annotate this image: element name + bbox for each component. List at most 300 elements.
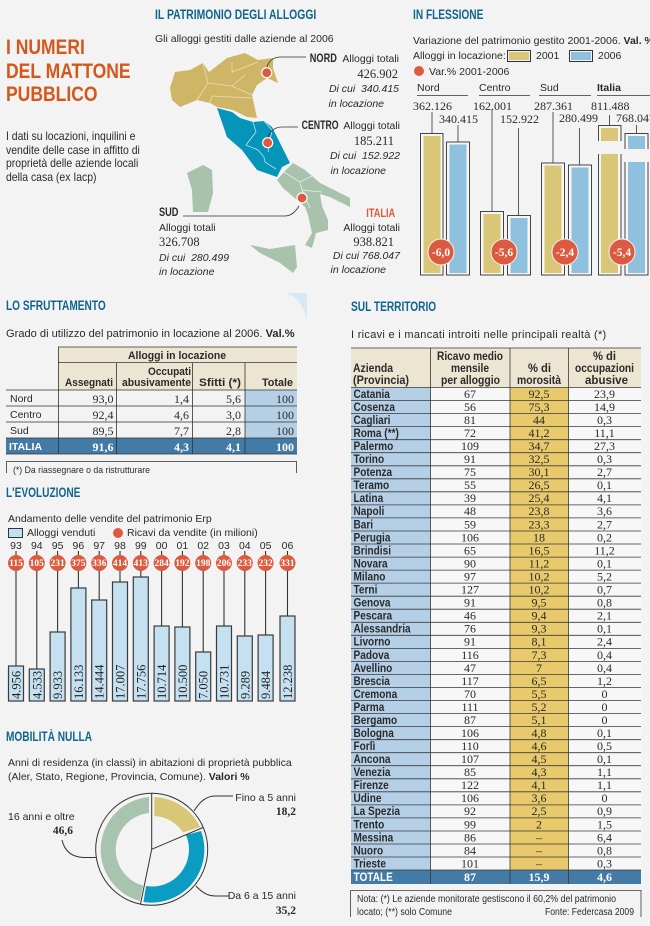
table: sul territorio: Parma bbox=[354, 701, 385, 714]
table: sul territorio: 91 bbox=[464, 634, 476, 648]
table: sul territorio: Padova bbox=[354, 649, 390, 662]
bar chart: in flessione: -6,0 bbox=[432, 247, 450, 259]
table: sul territorio: 11,2 bbox=[529, 556, 549, 570]
table: sul territorio: TOTALE bbox=[354, 871, 393, 884]
bar chart: l'evoluzione: 96 bbox=[73, 540, 84, 552]
bar chart: l'evoluzione: 10.500 bbox=[176, 665, 190, 699]
table: sul territorio: 2,5 bbox=[532, 804, 546, 818]
table: sul territorio: locato; (**) solo Comune bbox=[357, 907, 452, 918]
table: sul territorio: – bbox=[535, 856, 543, 870]
table: sul territorio: 70 bbox=[464, 687, 476, 701]
bar chart: l'evoluzione: 06 bbox=[282, 540, 293, 552]
heading: lo sfruttamento: LO SFRUTTAMENTO bbox=[6, 298, 106, 313]
intro text: proprietà delle aziende locali bbox=[6, 156, 138, 170]
chart: group labels: 162.001 bbox=[473, 99, 512, 113]
region: centro bbox=[217, 108, 290, 177]
table: sul territorio: 67 bbox=[464, 387, 476, 401]
bar chart: l'evoluzione: 17.007 bbox=[114, 665, 128, 699]
bar chart: l'evoluzione: 9.289 bbox=[238, 671, 252, 699]
table: sul territorio: 0,4 bbox=[597, 661, 612, 675]
table: sul territorio: 0,1 bbox=[597, 752, 612, 766]
table: lo sfruttamento: 91,6 bbox=[92, 440, 114, 454]
table: sul territorio: Messina bbox=[354, 832, 394, 845]
bar chart: l'evoluzione: 7.050 bbox=[197, 671, 211, 699]
table: sul territorio: Cagliari bbox=[354, 414, 390, 427]
region: nord bbox=[170, 53, 278, 118]
table: sul territorio: 2,7 bbox=[597, 465, 612, 479]
table: sul territorio: 65 bbox=[464, 544, 476, 558]
table: lo sfruttamento: 92,4 bbox=[92, 408, 114, 422]
table: sul territorio: 0,3 bbox=[597, 452, 612, 466]
label: sud: in locazione bbox=[159, 266, 214, 278]
legend: in flessione bbox=[413, 50, 621, 78]
table: sul territorio: 107 bbox=[461, 752, 479, 766]
chart: group labels: Nord bbox=[417, 82, 440, 94]
table: lo sfruttamento: Nord bbox=[10, 393, 33, 405]
bar chart: l'evoluzione: 192 bbox=[175, 559, 190, 569]
table: sul territorio: 18 bbox=[533, 530, 545, 544]
table: sul territorio: 10,2 bbox=[528, 582, 550, 596]
subtitle: in flessione: Variazione del patrimonio gestito 2001-2006. Val. % bbox=[413, 35, 650, 47]
table: lo sfruttamento: Sfitti (*) bbox=[199, 377, 241, 389]
table: sul territorio: 0,1 bbox=[597, 622, 612, 636]
label: sud: Alloggi totali bbox=[159, 222, 216, 234]
table: sul territorio: 86 bbox=[464, 830, 476, 844]
table: sul territorio: Napoli bbox=[354, 505, 384, 518]
table: lo sfruttamento: 100 bbox=[276, 440, 294, 454]
title bbox=[6, 35, 131, 106]
table: lo sfruttamento: Centro bbox=[10, 409, 42, 421]
legend: in flessione: 2001 bbox=[536, 50, 559, 62]
table: lo sfruttamento: 5,6 bbox=[226, 392, 241, 406]
table: sul territorio: 56 bbox=[464, 400, 476, 414]
table: sul territorio: – bbox=[535, 844, 543, 858]
table: sul territorio: Roma (**) bbox=[354, 427, 399, 440]
table: sul territorio: Cremona bbox=[354, 688, 398, 701]
subtitle: lo sfruttamento: Grado di utilizzo del patrimonio in locazione al 2006. Val.% bbox=[6, 328, 295, 340]
label: sud: 326.708 bbox=[159, 235, 200, 249]
table: lo sfruttamento: ITALIA bbox=[9, 441, 42, 453]
table: sul territorio: 0,2 bbox=[597, 530, 612, 544]
table: sul territorio: 0,3 bbox=[597, 856, 612, 870]
table: sul territorio: 106 bbox=[461, 791, 479, 805]
table: sul territorio: 85 bbox=[464, 765, 476, 779]
table: sul territorio: 32,5 bbox=[528, 452, 550, 466]
table: sul territorio: 9,5 bbox=[532, 596, 546, 610]
chart: group labels: 811.488 bbox=[591, 99, 630, 113]
bar chart: l'evoluzione: 4.533 bbox=[30, 671, 44, 699]
intro text bbox=[6, 129, 140, 184]
table: sul territorio: 90 bbox=[464, 556, 476, 570]
bar chart: l'evoluzione: 17.756 bbox=[134, 665, 148, 699]
bar chart: l'evoluzione: 05 bbox=[260, 540, 272, 552]
subtitle: l'evoluzione: Andamento delle vendite del patrimonio Erp bbox=[8, 513, 212, 525]
label: nord: Di cui 340.415 bbox=[329, 83, 399, 95]
table: sul territorio: 0,1 bbox=[597, 478, 612, 492]
table: sul territorio: Latina bbox=[354, 492, 384, 505]
island: sicilia bbox=[250, 245, 297, 273]
table: sul territorio: 30,1 bbox=[528, 465, 550, 479]
chart: group labels: 362.126 bbox=[413, 99, 452, 113]
table: sul territorio: 72 bbox=[464, 426, 476, 440]
bar chart: l'evoluzione: 9.933 bbox=[51, 671, 65, 699]
table: sul territorio: 0,7 bbox=[597, 582, 612, 596]
table: sul territorio: 87 bbox=[464, 870, 476, 884]
table: sul territorio: 0 bbox=[602, 713, 608, 727]
bar chart: l'evoluzione: 331 bbox=[280, 559, 295, 569]
table: sul territorio: 26,5 bbox=[528, 478, 550, 492]
table: sul territorio: 5,2 bbox=[532, 700, 546, 714]
table: sul territorio: abusive bbox=[585, 375, 628, 387]
chart: group labels bbox=[413, 82, 650, 126]
chart: group labels: Centro bbox=[479, 82, 511, 94]
label: centro: Di cui 152.922 bbox=[330, 150, 400, 162]
label: 16 anni e oltre bbox=[8, 811, 75, 837]
table: lo sfruttamento: (*) Da riassegnare o da ristrutturare bbox=[13, 465, 150, 476]
table: sul territorio: 15,9 bbox=[528, 870, 550, 884]
table: sul territorio: 46 bbox=[464, 608, 476, 622]
table: sul territorio: 1,2 bbox=[597, 674, 612, 688]
label: italia: Alloggi totali bbox=[343, 222, 400, 234]
table: sul territorio: Cosenza bbox=[354, 401, 396, 414]
bar chart: l'evoluzione: 105 bbox=[30, 559, 44, 569]
table: sul territorio: 1,5 bbox=[597, 818, 612, 832]
label: italia: ITALIA bbox=[366, 208, 395, 220]
table: sul territorio: Ricavo medio bbox=[437, 351, 503, 363]
map of Italy bbox=[170, 53, 350, 273]
table: sul territorio: 75 bbox=[464, 465, 476, 479]
bar chart: in flessione: -2,4 bbox=[556, 247, 574, 259]
label: da 6 a 15 anni: Da 6 a 15 anni bbox=[228, 890, 296, 902]
bar chart: l'evoluzione: 04 bbox=[239, 540, 251, 552]
table: sul territorio: 0,1 bbox=[597, 556, 612, 570]
table: sul territorio: 110 bbox=[461, 739, 479, 753]
table: sul territorio: 92,5 bbox=[528, 387, 550, 401]
legend: in flessione: Var.% 2001-2006 bbox=[429, 66, 509, 78]
table: sul territorio: % di bbox=[593, 351, 616, 363]
table: sul territorio: Bergamo bbox=[354, 714, 397, 727]
bar chart: l'evoluzione: 284 bbox=[154, 559, 169, 569]
table: sul territorio: 111 bbox=[461, 700, 479, 714]
table: sul territorio: Fonte: Federcasa 2009 bbox=[545, 907, 634, 918]
label: italia: Di cui 768.047 bbox=[333, 250, 400, 262]
table: sul territorio: 4,1 bbox=[532, 778, 546, 792]
table: sul territorio: 0 bbox=[602, 700, 608, 714]
intro text: vendite delle case in affitto di bbox=[6, 142, 140, 156]
table: sul territorio: 59 bbox=[464, 518, 476, 532]
table: sul territorio: mensile bbox=[451, 363, 489, 375]
label: nord: in locazione bbox=[329, 98, 384, 110]
table: sul territorio: Brindisi bbox=[354, 545, 391, 558]
bar chart: l'evoluzione: 336 bbox=[92, 559, 107, 569]
table: sul territorio: 3,6 bbox=[532, 791, 546, 805]
segment: 16 anni e oltre bbox=[101, 797, 149, 901]
bar chart: l'evoluzione: 97 bbox=[93, 540, 105, 552]
heading: mobilità nulla: MOBILITÀ NULLA bbox=[6, 729, 92, 744]
table: sul territorio: 4,5 bbox=[532, 752, 546, 766]
bar chart: l'evoluzione: 232 bbox=[258, 559, 273, 569]
segment: fino a 5 anni bbox=[154, 797, 200, 832]
bar chart: l'evoluzione: 115 bbox=[9, 559, 23, 569]
table: sul territorio: 101 bbox=[461, 856, 479, 870]
region: sud bbox=[277, 163, 350, 248]
table: sul territorio: Novara bbox=[354, 558, 388, 571]
table: sul territorio: Torino bbox=[354, 453, 384, 466]
table: sul territorio: – bbox=[535, 830, 543, 844]
intro text: I dati su locazioni, inquilini e bbox=[6, 129, 135, 143]
table: sul territorio: Bari bbox=[354, 519, 373, 532]
table: sul territorio: 5,2 bbox=[597, 570, 612, 584]
label: centro: in locazione bbox=[331, 164, 386, 176]
table: sul territorio: Livorno bbox=[354, 636, 391, 649]
table: sul territorio: 2,4 bbox=[597, 634, 612, 648]
table: sul territorio: 9,4 bbox=[532, 608, 546, 622]
segment: da 6 a 15 anni bbox=[144, 831, 204, 903]
table: sul territorio: 75,3 bbox=[528, 400, 550, 414]
bar chart: l'evoluzione: 4.956 bbox=[10, 671, 24, 699]
table: sul territorio: 116 bbox=[461, 648, 479, 662]
table: sul territorio: Trieste bbox=[354, 858, 386, 871]
table: sul territorio: 16,5 bbox=[528, 544, 550, 558]
table: sul territorio: Azienda bbox=[353, 363, 394, 375]
table: lo sfruttamento: 93,0 bbox=[92, 392, 114, 406]
label: sud: SUD bbox=[159, 207, 178, 219]
title: DEL MATTONE bbox=[6, 58, 131, 82]
label: centro bbox=[301, 120, 400, 176]
bar chart: l'evoluzione: 12.238 bbox=[281, 665, 295, 699]
bar chart: l'evoluzione: 14.444 bbox=[93, 664, 107, 699]
table: lo sfruttamento: 100 bbox=[276, 392, 294, 406]
table: sul territorio: 1,1 bbox=[597, 778, 612, 792]
table: sul territorio: 106 bbox=[461, 726, 479, 740]
bar chart: in flessione: -5,6 bbox=[495, 247, 513, 259]
heading: in flessione: IN FLESSIONE bbox=[413, 7, 483, 22]
island: sardegna bbox=[187, 165, 213, 212]
label: sud bbox=[159, 207, 229, 278]
table: sul territorio: morosità bbox=[517, 375, 562, 387]
label: centro: Alloggi totali bbox=[343, 120, 400, 132]
subtitle: mobilità nulla bbox=[8, 757, 292, 782]
heading: patrimonio: IL PATRIMONIO DEGLI ALLOGGI bbox=[155, 7, 316, 22]
table: sul territorio: 5,5 bbox=[532, 687, 546, 701]
heading: l'evoluzione: L'EVOLUZIONE bbox=[6, 485, 80, 500]
table: sul territorio: 10,2 bbox=[528, 570, 550, 584]
table: lo sfruttamento: 100 bbox=[276, 408, 294, 422]
table: sul territorio: Catania bbox=[354, 388, 391, 401]
bar chart: l'evoluzione: 03 bbox=[218, 540, 230, 552]
table: sul territorio: 0 bbox=[602, 687, 608, 701]
table: sul territorio: 4,3 bbox=[532, 765, 546, 779]
table: sul territorio: % di bbox=[528, 363, 551, 375]
table: sul territorio: 7 bbox=[536, 661, 542, 675]
table: sul territorio: 9,3 bbox=[532, 622, 546, 636]
table: sul territorio: 39 bbox=[464, 491, 476, 505]
table: lo sfruttamento: 89,5 bbox=[92, 424, 114, 438]
table: sul territorio: La Spezia bbox=[354, 805, 401, 818]
table: lo sfruttamento: Totale bbox=[262, 377, 293, 389]
bar chart: l'evoluzione: 10.731 bbox=[218, 665, 232, 699]
bar chart: in flessione bbox=[286, 95, 650, 320]
table: lo sfruttamento: 3,0 bbox=[226, 408, 241, 422]
table: sul territorio: Bologna bbox=[354, 727, 395, 740]
table: sul territorio: 4,1 bbox=[597, 491, 612, 505]
table: sul territorio: 87 bbox=[464, 713, 476, 727]
table: sul territorio: 48 bbox=[464, 504, 476, 518]
table: sul territorio: Alessandria bbox=[354, 623, 411, 636]
label: italia: in locazione bbox=[331, 264, 386, 276]
label: italia: 938.821 bbox=[353, 235, 394, 249]
table: lo sfruttamento: Occupati bbox=[148, 366, 191, 378]
table: sul territorio: 7,3 bbox=[532, 648, 546, 662]
legend: l'evoluzione bbox=[8, 527, 258, 539]
table: sul territorio: Perugia bbox=[354, 532, 391, 545]
table: sul territorio: 0,3 bbox=[597, 413, 612, 427]
label: sud: Di cui 280.499 bbox=[159, 252, 229, 264]
table: sul territorio: 11,2 bbox=[594, 544, 615, 558]
bar chart: l'evoluzione: 16.133 bbox=[72, 665, 86, 699]
table: sul territorio: 55 bbox=[464, 478, 476, 492]
table: sul territorio: 0 bbox=[602, 791, 608, 805]
chart: group labels: Italia bbox=[597, 82, 621, 94]
bar chart: l'evoluzione bbox=[8, 540, 296, 702]
table: sul territorio: Venezia bbox=[354, 766, 391, 779]
label: centro: 185.211 bbox=[354, 134, 394, 148]
legend: l'evoluzione: Ricavi da vendite (in milioni) bbox=[127, 527, 258, 539]
table: sul territorio: 91 bbox=[464, 452, 476, 466]
table: sul territorio: per alloggio bbox=[441, 375, 500, 387]
chart: group labels: 152.922 bbox=[500, 112, 539, 126]
table: sul territorio: 81 bbox=[464, 413, 476, 427]
table: sul territorio: Nuoro bbox=[354, 845, 383, 858]
table: sul territorio: 0,1 bbox=[597, 726, 612, 740]
bar chart: l'evoluzione: 95 bbox=[52, 540, 64, 552]
table: sul territorio: 4,8 bbox=[532, 726, 546, 740]
label: da 6 a 15 anni: 35,2 bbox=[276, 904, 296, 916]
table: sul territorio: (Provincia) bbox=[353, 375, 409, 387]
table: sul territorio: 76 bbox=[464, 622, 476, 636]
table: sul territorio: Trento bbox=[354, 819, 385, 832]
chart: group labels: Sud bbox=[540, 82, 559, 94]
subtitle: patrimonio: Gli alloggi gestiti dalle aziende al 2006 bbox=[155, 33, 334, 45]
table: lo sfruttamento: abusivamente bbox=[122, 377, 191, 389]
label: fino a 5 anni: 18,2 bbox=[276, 806, 296, 818]
legend: l'evoluzione: Alloggi venduti bbox=[27, 527, 95, 539]
table: sul territorio: 0,5 bbox=[597, 739, 612, 753]
table: sul territorio: 117 bbox=[461, 674, 479, 688]
table: sul territorio: Udine bbox=[354, 792, 381, 805]
table: sul territorio: 14,9 bbox=[594, 400, 615, 414]
table: lo sfruttamento: 1,4 bbox=[174, 392, 189, 406]
table: sul territorio: Nota: (*) Le aziende monitorate gestiscono il 60,2% del patrimonio bbox=[357, 894, 616, 905]
table: sul territorio: 127 bbox=[461, 582, 479, 596]
bar chart: l'evoluzione: 99 bbox=[135, 540, 147, 552]
bar chart: l'evoluzione: 375 bbox=[71, 559, 86, 569]
table: sul territorio: 0,8 bbox=[597, 844, 612, 858]
table: sul territorio: 2,7 bbox=[597, 518, 612, 532]
table: sul territorio: occupazioni bbox=[575, 363, 634, 375]
label: centro: CENTRO bbox=[301, 120, 338, 132]
table: lo sfruttamento: 7,7 bbox=[174, 424, 189, 438]
bar chart: l'evoluzione: 10.714 bbox=[155, 664, 169, 699]
chart: group labels: 340.415 bbox=[439, 112, 478, 126]
label: nord bbox=[310, 53, 399, 110]
table: sul territorio: Milano bbox=[354, 571, 386, 584]
table: sul territorio: 2 bbox=[536, 818, 542, 832]
table: sul territorio: 84 bbox=[464, 844, 476, 858]
bar chart: l'evoluzione: 233 bbox=[238, 559, 252, 569]
table: sul territorio: 47 bbox=[464, 661, 476, 675]
title: PUBBLICO bbox=[6, 82, 98, 106]
table: sul territorio: Genova bbox=[354, 597, 391, 610]
bar chart: l'evoluzione: 413 bbox=[134, 559, 148, 569]
table: sul territorio: Ancona bbox=[354, 753, 391, 766]
table: lo sfruttamento: 4,1 bbox=[226, 440, 241, 454]
table: sul territorio: 0,9 bbox=[597, 804, 612, 818]
bar chart: l'evoluzione: 98 bbox=[114, 540, 126, 552]
table: sul territorio: 23,3 bbox=[528, 518, 550, 532]
table: lo sfruttamento: Sud bbox=[10, 425, 29, 437]
map markers bbox=[262, 68, 307, 203]
table: sul territorio: Palermo bbox=[354, 440, 393, 453]
table: lo sfruttamento bbox=[6, 346, 297, 476]
label: fino a 5 anni bbox=[235, 792, 296, 818]
table: sul territorio: Terni bbox=[354, 584, 377, 597]
table: sul territorio: 106 bbox=[461, 530, 479, 544]
table: sul territorio: 34,7 bbox=[528, 439, 550, 453]
leader lines bbox=[183, 57, 306, 216]
table: sul territorio: 44 bbox=[533, 413, 545, 427]
table: sul territorio: 0,4 bbox=[597, 648, 612, 662]
table: sul territorio: 11,1 bbox=[594, 426, 615, 440]
table: lo sfruttamento: 2,8 bbox=[226, 424, 241, 438]
table: sul territorio: 97 bbox=[464, 570, 476, 584]
table: sul territorio: 6,4 bbox=[597, 830, 612, 844]
table: lo sfruttamento: 100 bbox=[276, 424, 294, 438]
table: sul territorio: Potenza bbox=[354, 466, 393, 479]
table: lo sfruttamento: Assegnati bbox=[65, 377, 113, 389]
table: sul territorio: 92 bbox=[464, 804, 476, 818]
bar chart: l'evoluzione: 414 bbox=[113, 559, 127, 569]
chart: group labels: 280.499 bbox=[559, 111, 598, 125]
bar chart: l'evoluzione: 231 bbox=[50, 559, 65, 569]
table: sul territorio: 0,8 bbox=[597, 596, 612, 610]
table: sul territorio: 23,9 bbox=[594, 387, 615, 401]
table: lo sfruttamento: Alloggi in locazione bbox=[128, 350, 226, 362]
bar chart: l'evoluzione: 02 bbox=[197, 540, 209, 552]
bar chart: l'evoluzione: 94 bbox=[31, 540, 43, 552]
chart: group labels: 287.361 bbox=[534, 99, 573, 113]
table: sul territorio: 5,1 bbox=[532, 713, 546, 727]
label: nord: 426.902 bbox=[357, 66, 398, 80]
table: sul territorio: Brescia bbox=[354, 675, 391, 688]
label: nord: NORD bbox=[310, 53, 337, 65]
label: italia bbox=[330, 208, 400, 276]
table: sul territorio: Pescara bbox=[354, 610, 393, 623]
table: sul territorio: 4,6 bbox=[532, 739, 546, 753]
table: sul territorio: 41,2 bbox=[528, 426, 550, 440]
table: sul territorio: 3,6 bbox=[597, 504, 612, 518]
table: sul territorio: Teramo bbox=[354, 479, 389, 492]
legend: in flessione: 2006 bbox=[598, 50, 621, 62]
table: sul territorio: 27,3 bbox=[594, 439, 615, 453]
bar chart: l'evoluzione: 00 bbox=[156, 540, 168, 552]
heading: sul territorio: SUL TERRITORIO bbox=[351, 299, 436, 314]
label: da 6 a 15 anni bbox=[228, 890, 296, 916]
table: sul territorio: 2,1 bbox=[597, 608, 612, 622]
table: sul territorio: 23,8 bbox=[528, 504, 550, 518]
intro text: della casa (ex Iacp) bbox=[6, 170, 97, 184]
bar chart: l'evoluzione: 198 bbox=[196, 559, 211, 569]
